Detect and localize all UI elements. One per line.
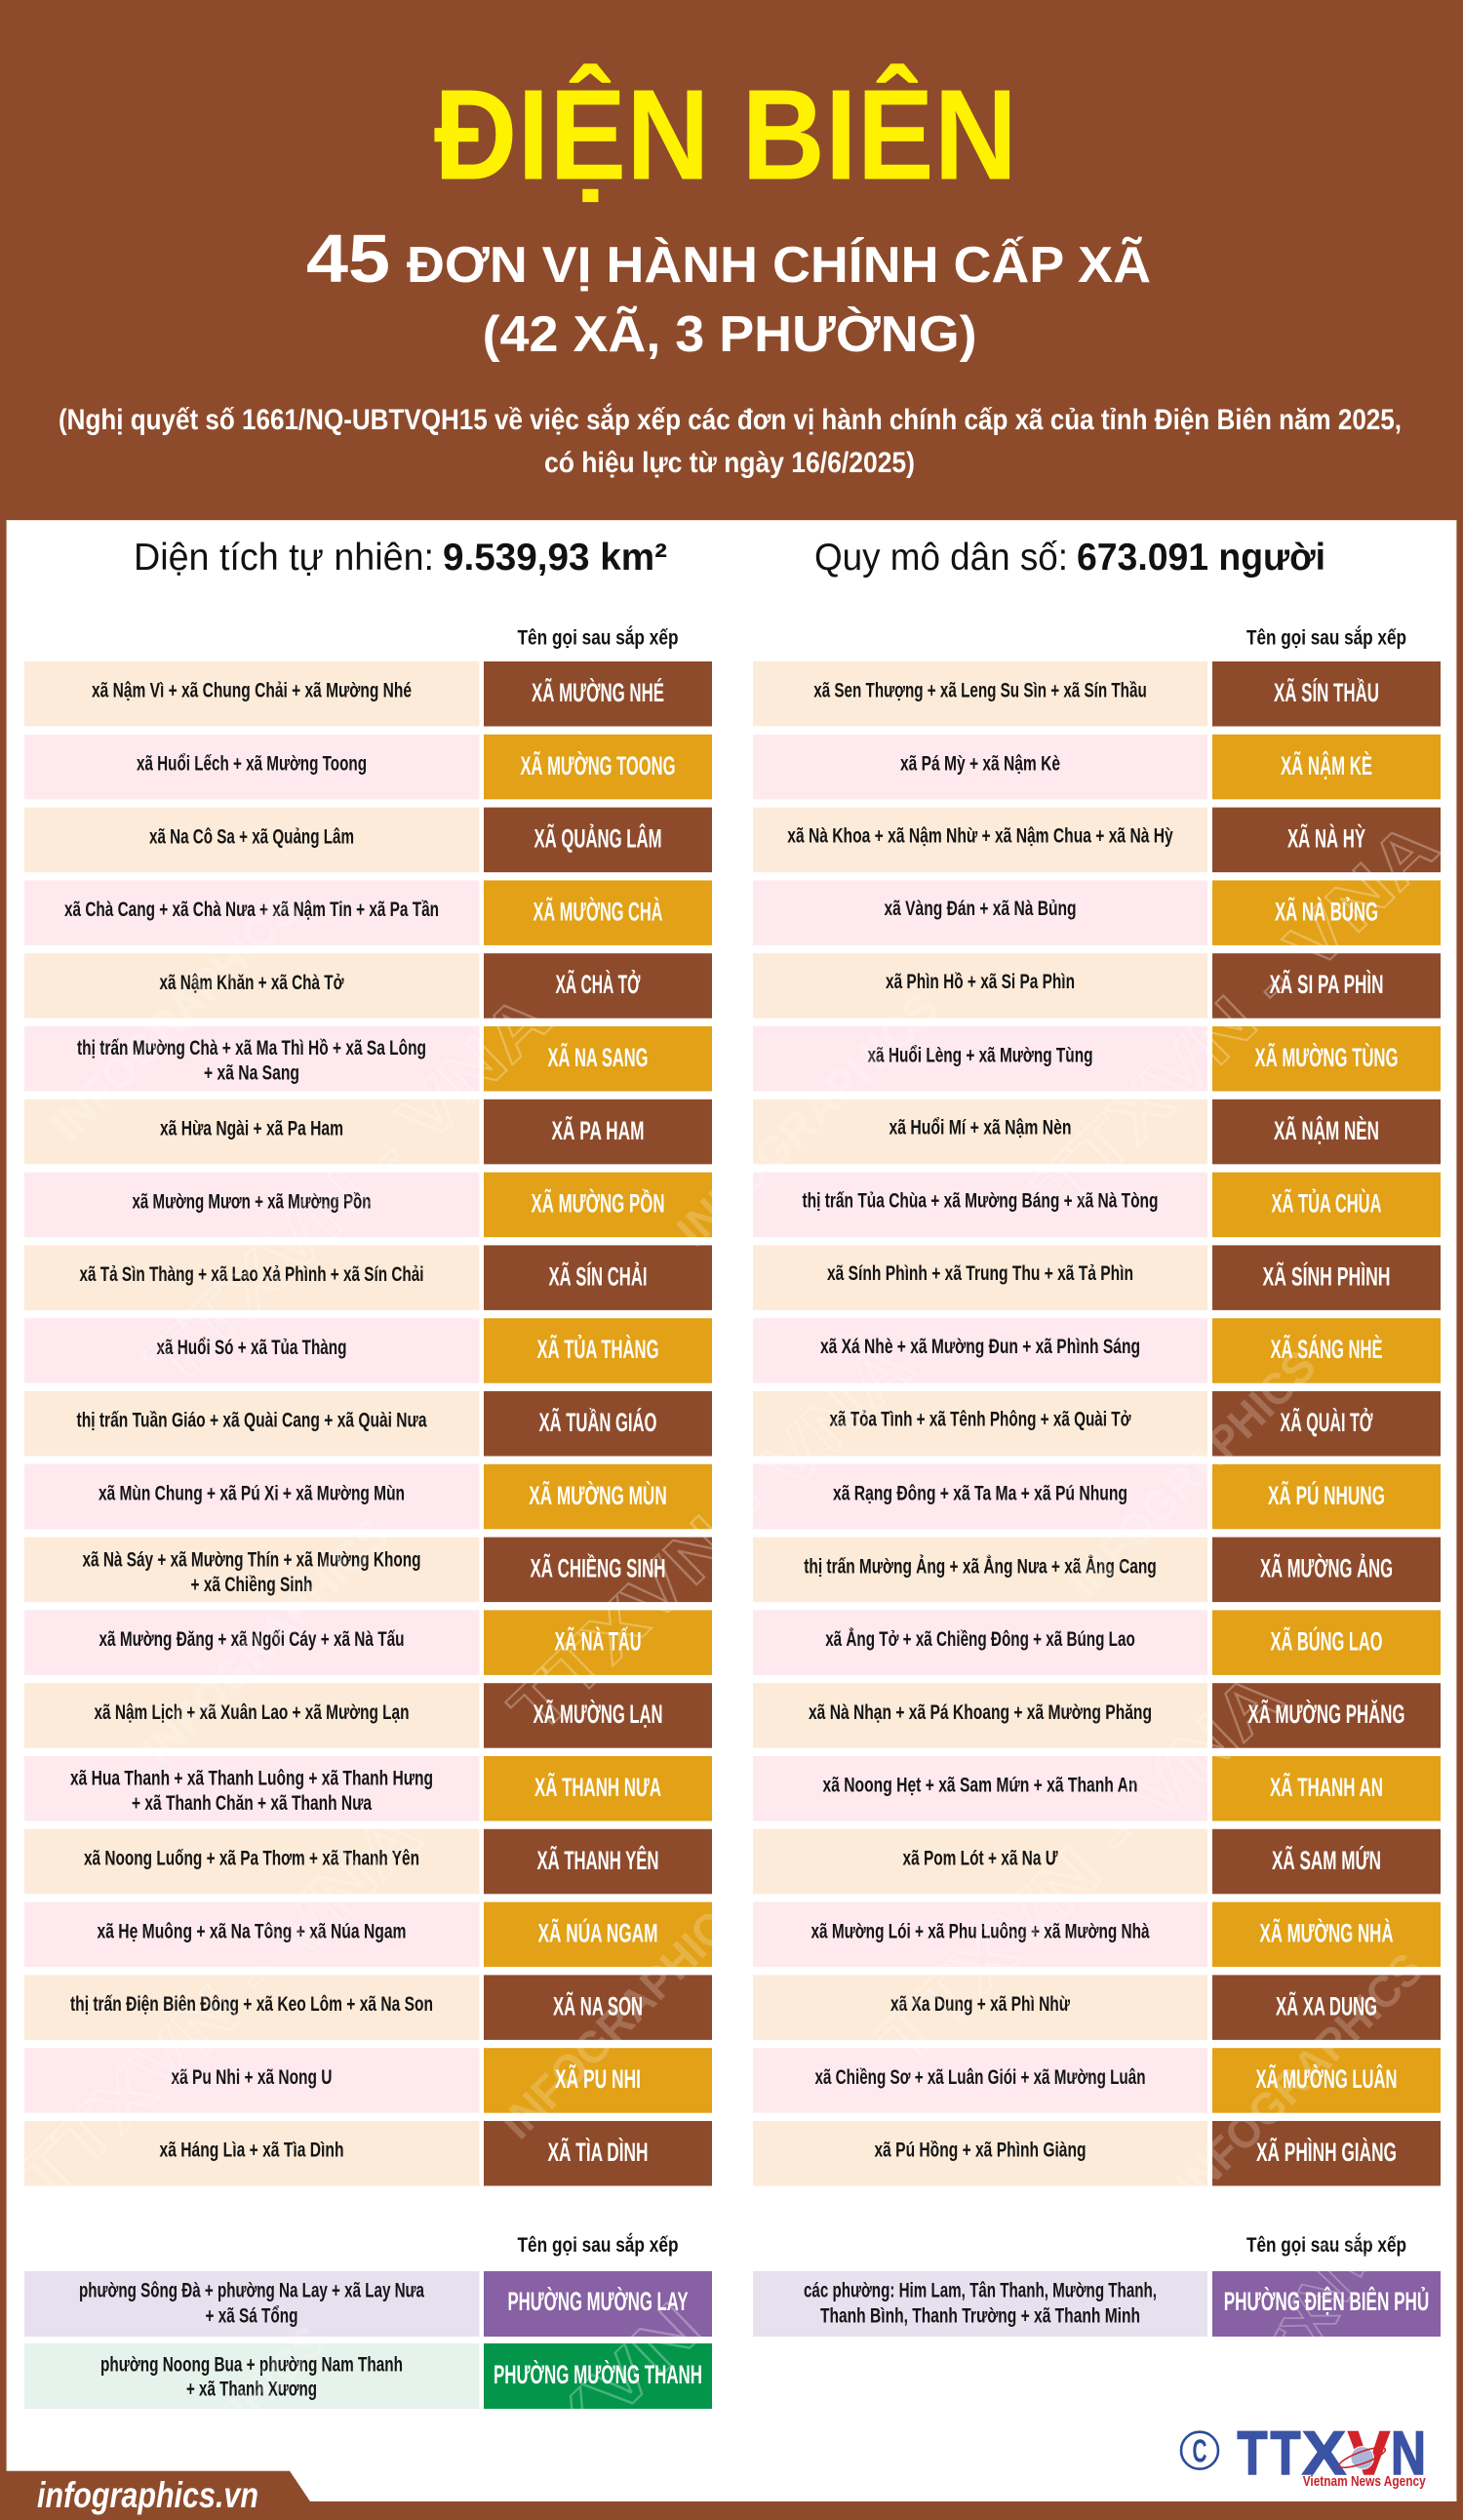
row: Mường Nhé: xã Nậm Vì + xã Chung Chải + xã Mường Nhé (92, 680, 412, 702)
footer: brown tab with site name: infographics.vn (37, 2475, 258, 2515)
ward heading right: Tên gọi sau sắp xếp (1246, 2233, 1406, 2257)
row: Tủa Chùa: thị trấn Tủa Chùa + xã Mường Báng + xã Nà Tòng (802, 1189, 1159, 1212)
watermark outline: TTXVN - VNA (864, 1658, 1297, 2080)
watermark: INFOGRAPHICS (1166, 1942, 1433, 2210)
row: Pa Ham: XÃ PA HAM (552, 1116, 644, 1145)
watermark (41, 883, 1433, 2520)
row: Núa Ngam: XÃ NÚA NGAM (538, 1919, 657, 1948)
stat: natural area: 9.539,93 km² (443, 537, 667, 579)
footer: brown tab with site name (0, 2471, 1463, 2520)
row: Tủa Chùa (753, 1173, 1441, 1237)
ward row: Điện Biên Phủ (753, 2271, 1441, 2337)
logo: TTXVN: V (1348, 2420, 1390, 2488)
row: Thanh Nưa (24, 1756, 712, 1820)
ward heading left: Tên gọi sau sắp xếp (517, 2233, 679, 2257)
watermark: INFOGRAPHICS (132, 1507, 399, 1775)
row: Quài Tở: xã Tỏa Tình + xã Tênh Phông + xã Quài Tở (829, 1409, 1131, 1431)
row: Nà Hỳ: XÃ NÀ HỲ (1287, 824, 1365, 854)
row: Mường Lạn (24, 1683, 712, 1748)
ward row: Mường Thanh: + xã Thanh Xương (186, 2379, 317, 2401)
row: Tủa Thàng (24, 1318, 712, 1383)
right table (753, 661, 1441, 2185)
subtitle: 45 units: 45 (306, 220, 390, 297)
watermark outline (4, 807, 1453, 2520)
watermark: INFOGRAPHICS (667, 982, 948, 1256)
row: Mường Ảng (753, 1538, 1441, 1602)
row: Nà Tấu: xã Mường Đăng + xã Ngối Cáy + xã Nà Tấu (99, 1628, 404, 1651)
row: Na Son: XÃ NA SON (553, 1991, 643, 2020)
row: Mường Pồn: xã Mường Mươn + xã Mường Pồn (133, 1190, 371, 1213)
row: Si Pa Phìn (753, 953, 1441, 1019)
row: Tuần Giáo: XÃ TUẦN GIÁO (538, 1408, 657, 1437)
row: Quài Tở: XÃ QUÀI TỞ (1280, 1408, 1373, 1437)
row: Pa Ham (24, 1100, 712, 1164)
row: Nà Bủng: XÃ NÀ BỦNG (1275, 897, 1378, 926)
row: Pu Nhi (24, 2048, 712, 2113)
row: Thanh Nưa: + xã Thanh Chăn + xã Thanh Nưa (132, 1792, 372, 1815)
row: Tìa Dình: xã Háng Lìa + xã Tìa Dình (160, 2140, 343, 2162)
row: Mường Lạn: xã Nậm Lịch + xã Xuân Lao + xã Mường Lạn (94, 1701, 410, 1724)
row: Thanh Yên: XÃ THANH YÊN (536, 1846, 659, 1875)
row: Quảng Lâm (24, 808, 712, 872)
row: Chiềng Sinh: XÃ CHIỀNG SINH (531, 1554, 665, 1583)
watermark outline: TTXVN - VNA (133, 980, 566, 1402)
stat: natural area (134, 537, 667, 579)
row: Quảng Lâm: xã Na Cô Sa + xã Quảng Lâm (149, 825, 354, 848)
logo: TTXVN: T (1237, 2420, 1268, 2488)
stat: population (814, 537, 1325, 579)
watermark outline: TTXVN - VNA (4, 1796, 437, 2219)
row: Nà Bủng (753, 880, 1441, 945)
watermark: INFOGRAPHICS (1058, 1340, 1325, 1607)
watermark outline: TTXVN - VNA (1020, 807, 1453, 1229)
row: Tìa Dình: XÃ TÌA DÌNH (548, 2138, 648, 2167)
resolution note: có hiệu lực từ ngày 16/6/2025) (544, 447, 915, 479)
ward row: Mường Lay: phường Sông Đà + phường Na Lay + xã Lay Nưa (79, 2280, 424, 2302)
row: Nậm Kè: xã Pá Mỳ + xã Nậm Kè (900, 752, 1060, 775)
row: Mường Ảng: thị trấn Mường Ảng + xã Ẳng Nưa + xã Ẳng Cang (804, 1555, 1157, 1578)
logo: TTXVN: X (1302, 2420, 1346, 2488)
row: Mường Tùng (753, 1026, 1441, 1091)
stat: population: Quy mô dân số: (814, 537, 1068, 579)
left table (24, 661, 712, 2185)
row: Chà Tở: xã Nậm Khăn + xã Chà Tở (160, 972, 344, 994)
row: Sáng Nhè: xã Xá Nhè + xã Mường Đun + xã Phình Sáng (820, 1336, 1140, 1358)
row: Xa Dung: XÃ XA DUNG (1276, 1991, 1377, 2020)
row: Sam Mứn (753, 1829, 1441, 1894)
row: Pú Nhung: xã Rạng Đông + xã Ta Ma + xã Pú Nhung (833, 1483, 1127, 1505)
row: Chà Tở: XÃ CHÀ TỞ (556, 970, 641, 999)
watermark outline: TTXVN (1232, 2213, 1393, 2422)
row: Nậm Kè: XÃ NẬM KÈ (1281, 751, 1372, 780)
row: Mường Nhé (24, 661, 712, 726)
logo: TTXVN: Vietnam News Agency (1303, 2474, 1426, 2490)
row: Na Sang: + xã Na Sang (204, 1062, 299, 1085)
row: Mường Nhà (753, 1902, 1441, 1967)
watermark outline: TTXVN - VNA (495, 1327, 929, 1749)
row: Mường Mùn: xã Mùn Chung + xã Pú Xi + xã Mường Mùn (99, 1483, 405, 1505)
ward row: Mường Lay: + xã Sá Tổng (205, 2305, 298, 2328)
row: Quài Tở (753, 1391, 1441, 1456)
logo: copyright symbol: C (1192, 2432, 1207, 2468)
row: Mường Pồn: XÃ MƯỜNG PỒN (531, 1189, 665, 1219)
row: Thanh An: XÃ THANH AN (1270, 1773, 1383, 1802)
row: Phình Giàng (753, 2121, 1441, 2185)
row: Sín Thầu: xã Sen Thượng + xã Leng Su Sìn + xã Sín Thầu (813, 680, 1147, 702)
row: Tủa Thàng: xã Huổi Só + xã Tủa Thàng (156, 1337, 347, 1359)
row: Tuần Giáo: thị trấn Tuần Giáo + xã Quài Cang + xã Quài Nưa (76, 1410, 427, 1432)
stat: natural area: Diện tích tự nhiên: (134, 537, 434, 579)
row: Si Pa Phìn: XÃ SI PA PHÌN (1270, 970, 1383, 999)
row: Na Sang: XÃ NA SANG (548, 1043, 648, 1072)
row: Na Sang: thị trấn Mường Chà + xã Ma Thì Hồ + xã Sa Lông (77, 1037, 426, 1060)
row: Mường Phăng: xã Nà Nhạn + xã Pá Khoang + xã Mường Phăng (809, 1701, 1152, 1724)
subtitle: 45 units: ĐƠN VỊ HÀNH CHÍNH CẤP XÃ (407, 236, 1151, 294)
row: Sính Phình: xã Sính Phình + xã Trung Thu + xã Tả Phìn (827, 1262, 1133, 1285)
subtitle: 42 communes, 3 wards: (42 XÃ, 3 PHƯỜNG) (483, 305, 977, 363)
row: Mường Mùn: XÃ MƯỜNG MÙN (529, 1481, 667, 1510)
row: Nà Tấu: XÃ NÀ TẤU (554, 1626, 642, 1656)
row: Mường Chà (24, 880, 712, 945)
row: Mường Mùn (24, 1464, 712, 1529)
row: Mường Toong (24, 735, 712, 799)
row: Mường Tùng: xã Huổi Lèng + xã Mường Tùng (868, 1045, 1092, 1067)
row: Sính Phình: XÃ SÍNH PHÌNH (1262, 1261, 1391, 1291)
logo: copyright symbol (1181, 2432, 1218, 2469)
row: Mường Chà: xã Chà Cang + xã Chà Nưa + xã Nậm Tin + xã Pa Tần (64, 899, 439, 921)
ward row: Điện Biên Phủ: Thanh Bình, Thanh Trường + xã Thanh Minh (820, 2305, 1140, 2328)
row: Mường Chà: XÃ MƯỜNG CHÀ (533, 897, 663, 926)
logo: TTXVN: T (1270, 2420, 1301, 2488)
row: Sam Mứn: XÃ SAM MỨN (1272, 1846, 1381, 1875)
ward row: Mường Lay (24, 2271, 712, 2337)
row: Nậm Nèn (753, 1100, 1441, 1164)
row: Tuần Giáo (24, 1391, 712, 1456)
row: Si Pa Phìn: xã Phìn Hồ + xã Si Pa Phìn (886, 971, 1075, 993)
row: Pu Nhi: XÃ PU NHI (555, 2064, 641, 2094)
row: Sam Mứn: xã Pom Lót + xã Na Ư (903, 1848, 1058, 1870)
ward row: Mường Thanh: phường Noong Bua + phường Nam Thanh (100, 2354, 403, 2377)
logo: TTXVN (1237, 2420, 1426, 2490)
row: Mường Luân (753, 2048, 1441, 2113)
row: Nà Hỳ: xã Nà Khoa + xã Nậm Nhừ + xã Nậm Chua + xã Nà Hỳ (787, 824, 1173, 847)
row: Thanh An (753, 1756, 1441, 1820)
row: Sính Phình (753, 1245, 1441, 1310)
row: Nà Tấu (24, 1610, 712, 1675)
row: Mường Toong: XÃ MƯỜNG TOONG (521, 751, 675, 780)
row: Sáng Nhè: XÃ SÁNG NHÈ (1270, 1335, 1383, 1364)
row: Sín Chải: XÃ SÍN CHẢI (548, 1261, 648, 1291)
row: Quảng Lâm: XÃ QUẢNG LÂM (534, 824, 661, 854)
row: Chiềng Sinh: xã Nà Sáy + xã Mường Thín + xã Mường Khong (82, 1548, 421, 1571)
row: Búng Lao: XÃ BÚNG LAO (1270, 1626, 1383, 1656)
row: Tủa Thàng: XÃ TỦA THÀNG (536, 1335, 659, 1364)
white content panel (7, 521, 1456, 2501)
row: Thanh Yên (24, 1829, 712, 1894)
watermark: INFOGRAPHICS (491, 1881, 758, 2148)
row: Phình Giàng: xã Pú Hồng + xã Phình Giàng (874, 2140, 1087, 2162)
row: Sín Thầu: XÃ SÍN THẦU (1274, 678, 1379, 707)
row: Sáng Nhè (753, 1318, 1441, 1383)
column heading right: Tên gọi sau sắp xếp (1246, 626, 1406, 650)
row: Nậm Nèn: XÃ NẬM NÈN (1274, 1116, 1379, 1145)
row: Mường Phăng (753, 1683, 1441, 1748)
row: Mường Nhà: xã Mường Lói + xã Phu Luông + xã Mường Nhà (811, 1920, 1150, 1942)
row: Thanh Yên: xã Noong Luống + xã Pa Thơm + xã Thanh Yên (84, 1848, 419, 1870)
row: Núa Ngam (24, 1902, 712, 1967)
row: Nà Bủng: xã Vàng Đán + xã Nà Bủng (884, 898, 1077, 920)
row: Sín Chải: xã Tả Sìn Thàng + xã Lao Xả Phình + xã Sín Chải (80, 1263, 423, 1286)
row: Thanh Nưa: xã Hua Thanh + xã Thanh Luông + xã Thanh Hưng (70, 1768, 433, 1790)
row: Mường Lạn: XÃ MƯỜNG LẠN (533, 1700, 663, 1729)
row: Thanh An: xã Noong Hẹt + xã Sam Mứn + xã Thanh An (823, 1775, 1137, 1797)
row: Mường Pồn (24, 1173, 712, 1237)
row: Búng Lao: xã Ẳng Tở + xã Chiềng Đông + xã Búng Lao (825, 1628, 1135, 1651)
row: Pu Nhi: xã Pu Nhi + xã Nong U (172, 2066, 332, 2089)
row: Thanh Nưa: XÃ THANH NƯA (534, 1773, 661, 1802)
ward row: Mường Thanh: PHƯỜNG MƯỜNG THANH (494, 2360, 702, 2389)
row: Nà Hỳ (753, 808, 1441, 872)
row: Xa Dung (753, 1975, 1441, 2040)
row: Búng Lao (753, 1610, 1441, 1675)
row: Xa Dung: xã Xa Dung + xã Phì Nhừ (890, 1993, 1071, 2016)
row: Mường Luân: xã Chiềng Sơ + xã Luân Giói + xã Mường Luân (815, 2066, 1145, 2089)
row: Nậm Kè (753, 735, 1441, 799)
row: Chiềng Sinh (24, 1538, 712, 1602)
row: Sín Chải (24, 1245, 712, 1310)
stat: population: 673.091 người (1077, 537, 1325, 579)
watermark: INFOGRAPHICS (41, 883, 308, 1150)
row: Mường Toong: xã Huổi Lếch + xã Mường Toong (137, 752, 367, 775)
header (59, 62, 1402, 479)
row: Pú Nhung (753, 1464, 1441, 1529)
logo: TTXVN: N (1391, 2420, 1426, 2488)
row: Tìa Dình (24, 2121, 712, 2185)
subtitle: 45 units (306, 220, 1151, 297)
row: Na Son (24, 1975, 712, 2040)
row: Na Son: thị trấn Điện Biên Đông + xã Keo Lôm + xã Na Son (70, 1993, 433, 2016)
ward row: Mường Thanh (24, 2343, 712, 2409)
logo: globe with orbit (1337, 2444, 1387, 2471)
row: Pú Nhung: XÃ PÚ NHUNG (1268, 1481, 1385, 1510)
row: Núa Ngam: xã Hẹ Muông + xã Na Tông + xã Núa Ngam (98, 1920, 406, 1942)
ward row: Điện Biên Phủ: các phường: Him Lam, Tân Thanh, Mường Thanh, (804, 2280, 1157, 2302)
column heading left: Tên gọi sau sắp xếp (517, 626, 679, 650)
row: Chiềng Sinh: + xã Chiềng Sinh (191, 1574, 312, 1596)
title: ĐIỆN BIÊN (434, 62, 1017, 207)
row: Nậm Nèn: xã Huổi Mí + xã Nậm Nèn (890, 1117, 1071, 1140)
row: Chà Tở (24, 953, 712, 1019)
ward row: Mường Lay: PHƯỜNG MƯỜNG LAY (507, 2287, 689, 2316)
resolution note (59, 403, 1402, 479)
row: Sín Thầu (753, 661, 1441, 726)
row: Na Sang (24, 1026, 712, 1091)
row: Tủa Chùa: XÃ TỦA CHÙA (1272, 1189, 1381, 1219)
row: Pa Ham: xã Hừa Ngài + xã Pa Ham (160, 1118, 343, 1140)
row: Mường Nhé: XÃ MƯỜNG NHÉ (532, 678, 664, 707)
